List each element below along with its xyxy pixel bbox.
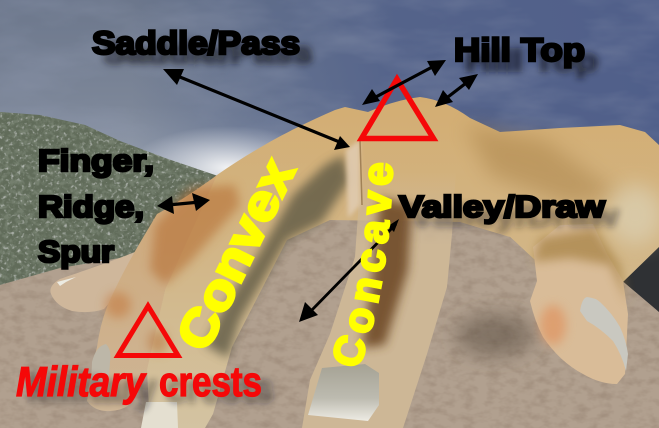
thumb nail bbox=[580, 297, 628, 371]
orange creases on fingers bbox=[150, 185, 240, 285]
label: concave text on curve: Concave bbox=[333, 162, 394, 366]
thumb orange tint bbox=[540, 305, 566, 345]
arrow: valley/draw bbox=[299, 219, 399, 322]
label: finger, ridge, spur: Spur bbox=[38, 234, 114, 269]
label: military crests: Military bbox=[16, 358, 147, 405]
label shadows: Military crests bbox=[28, 367, 274, 411]
concave finger bbox=[302, 170, 456, 428]
ground mound bbox=[0, 205, 659, 428]
label shadows: Hill Top bbox=[465, 43, 598, 78]
concave finger nail bbox=[308, 364, 379, 421]
convex finger and back of hand bbox=[147, 97, 659, 428]
arrow: hill top right bbox=[435, 74, 478, 107]
label: finger, ridge, spur: Ridge, bbox=[38, 189, 144, 224]
label: finger, ridge, spur: Finger, bbox=[38, 143, 154, 178]
concave finger dark band bbox=[362, 198, 412, 348]
knuckle shading bbox=[465, 125, 620, 205]
crease line bbox=[360, 140, 362, 205]
ridge finger nail bbox=[91, 344, 110, 398]
thumb shading bbox=[533, 228, 628, 305]
pinky nail bbox=[57, 277, 76, 286]
small triangle: military crest bbox=[118, 306, 178, 356]
pale hand patch lower right bbox=[607, 185, 659, 245]
sky background bbox=[0, 0, 659, 300]
hand bbox=[50, 97, 659, 428]
big triangle: hill top bbox=[362, 79, 434, 138]
label: finger, ridge, spur bbox=[38, 143, 154, 269]
orange mark near small triangle bbox=[105, 292, 131, 318]
convex finger nail bbox=[141, 402, 178, 428]
label: military crests: crests bbox=[159, 358, 262, 405]
hill on the left bbox=[0, 110, 232, 288]
convex dark shadow band bbox=[205, 155, 350, 358]
label shadows: Valley/Draw bbox=[410, 200, 619, 233]
arrow: saddle/pass bbox=[163, 69, 350, 150]
label: saddle/pass: Saddle/Pass bbox=[92, 25, 300, 61]
orange mark under small triangle bbox=[148, 330, 168, 354]
label shadows bbox=[28, 35, 619, 411]
pale crease between fingers bbox=[346, 140, 360, 218]
label: concave baseline curve bbox=[358, 140, 393, 370]
label: valley/draw: Valley/Draw bbox=[399, 189, 606, 224]
thumb bbox=[530, 224, 628, 384]
ridge finger bbox=[87, 175, 240, 411]
distant dark terrain at right bbox=[600, 240, 659, 312]
arrow: hill top left bbox=[362, 60, 446, 105]
label: hill top: Hill Top bbox=[454, 32, 585, 68]
label shadows: Saddle/Pass bbox=[103, 35, 313, 70]
label: convex: Convex bbox=[166, 150, 306, 359]
pinky finger bbox=[50, 250, 140, 312]
arrow: finger bbox=[157, 193, 210, 214]
label: military crests bbox=[16, 358, 262, 405]
